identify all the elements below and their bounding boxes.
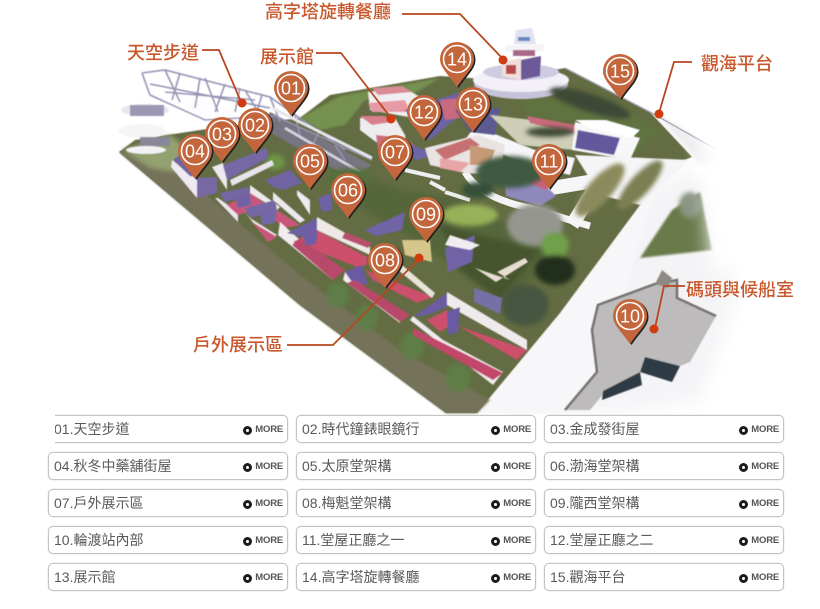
trees (265, 81, 701, 392)
button 04: 04.秋冬中藥舖街屋 (54, 458, 171, 474)
button 02: 02.時代鐘錶眼鏡行 (302, 421, 419, 437)
marker 07 (378, 135, 414, 181)
button 15 (544, 563, 784, 591)
callout: 觀海平台 (654, 54, 773, 118)
button 11 (296, 526, 536, 554)
button 04 (48, 452, 288, 480)
button 13: 13.展示館 (54, 569, 115, 585)
marker 01: 01 (281, 78, 301, 98)
button 12: 12.堂屋正廳之二 (550, 532, 653, 548)
marker 11 (532, 144, 568, 190)
button 03 (544, 415, 784, 443)
button 10: 10.輪渡站內部 (54, 532, 143, 548)
button 06: MORE (751, 461, 779, 472)
marker 02 (238, 108, 274, 154)
marker 12: 12 (414, 102, 434, 122)
left round plaza (118, 104, 170, 154)
marker 04 (178, 134, 214, 180)
button 14: MORE (503, 572, 531, 583)
marker 15: 15 (610, 62, 630, 82)
right fade overlay (700, 120, 820, 270)
button 12: MORE (751, 535, 779, 546)
button 09: 09.隴西堂架構 (550, 495, 639, 511)
button 06 (544, 452, 784, 480)
callout: 觀海平台: 觀海平台 (701, 54, 773, 74)
callout: 天空步道: 天空步道 (127, 43, 199, 63)
marker 03: 03 (212, 124, 232, 144)
button 09: MORE (751, 498, 779, 509)
marker 10: 10 (620, 306, 640, 326)
marker 05 (293, 144, 328, 190)
ground area (119, 68, 712, 413)
marker 09 (409, 197, 444, 243)
button 01: 01.天空步道 (54, 421, 129, 437)
button 07: 07.戶外展示區 (54, 495, 143, 511)
callout: 戶外展示區 (193, 254, 424, 355)
button 01 (48, 415, 288, 443)
button 05: MORE (503, 461, 531, 472)
park map illustration (118, 2, 794, 414)
callout: 天空步道 (127, 43, 246, 108)
marker 13: 13 (463, 94, 483, 114)
button 03: 03.金成發街屋 (550, 421, 639, 437)
button 06: 06.渤海堂架構 (550, 458, 639, 474)
white paths and pavement strips (405, 68, 735, 226)
button 07 (48, 489, 288, 517)
marker 08 (368, 243, 404, 289)
marker 12 (407, 95, 442, 141)
pavement (477, 112, 735, 413)
marker 01 (274, 71, 310, 117)
button 10 (48, 526, 288, 554)
marker 11: 11 (540, 152, 558, 172)
sky walkway bridge (142, 70, 372, 178)
button 09 (544, 489, 784, 517)
callout: 高字塔旋轉餐廳 (265, 2, 508, 64)
callout: 戶外展示區: 戶外展示區 (193, 335, 283, 355)
north buildings (360, 86, 640, 206)
button 08 (296, 489, 536, 517)
revolving restaurant tower (473, 28, 569, 99)
button 15: 15.觀海平台 (550, 569, 625, 585)
button 11: 11.堂屋正廳之一 (302, 532, 404, 548)
button 12 (544, 526, 784, 554)
marker 14 (440, 42, 476, 88)
button 05: 05.太原堂架構 (302, 458, 391, 474)
button 08: MORE (503, 498, 531, 509)
marker 13 (456, 87, 492, 133)
callout: 碼頭與候船室 (650, 280, 794, 334)
button 02 (296, 415, 536, 443)
button 15: MORE (751, 572, 779, 583)
button 11: MORE (503, 535, 531, 546)
marker 08: 08 (375, 250, 395, 270)
marker 06: 06 (338, 180, 358, 200)
button 13: MORE (255, 572, 283, 583)
marker 06 (331, 173, 366, 219)
button 10: MORE (255, 535, 283, 546)
button 07: MORE (255, 498, 283, 509)
button 14: 14.高字塔旋轉餐廳 (302, 569, 419, 585)
button 13 (48, 563, 288, 591)
callout: 碼頭與候船室: 碼頭與候船室 (686, 280, 794, 300)
dock and waiting room (565, 270, 716, 410)
button 03: MORE (751, 424, 779, 435)
marker 07: 07 (385, 142, 405, 162)
callout: 展示館 (260, 47, 396, 124)
button 01: MORE (255, 424, 283, 435)
callout: 高字塔旋轉餐廳: 高字塔旋轉餐廳 (265, 2, 391, 22)
marker 02: 02 (245, 116, 265, 136)
marker 03 (205, 117, 240, 163)
marker 05: 05 (300, 152, 320, 172)
marker 14: 14 (447, 50, 467, 70)
button 05 (296, 452, 536, 480)
button 08: 08.梅魁堂架構 (302, 495, 391, 511)
clipped left edge of button 01 (47, 414, 55, 444)
button 02: MORE (503, 424, 531, 435)
marker 04: 04 (185, 142, 205, 162)
button 04: MORE (255, 461, 283, 472)
marker 10 (613, 299, 648, 345)
outdoor exhibition wall ruins (171, 148, 528, 385)
button 14 (296, 563, 536, 591)
callout: 展示館: 展示館 (260, 47, 314, 67)
marker 15 (603, 54, 638, 100)
marker 09: 09 (416, 204, 436, 224)
